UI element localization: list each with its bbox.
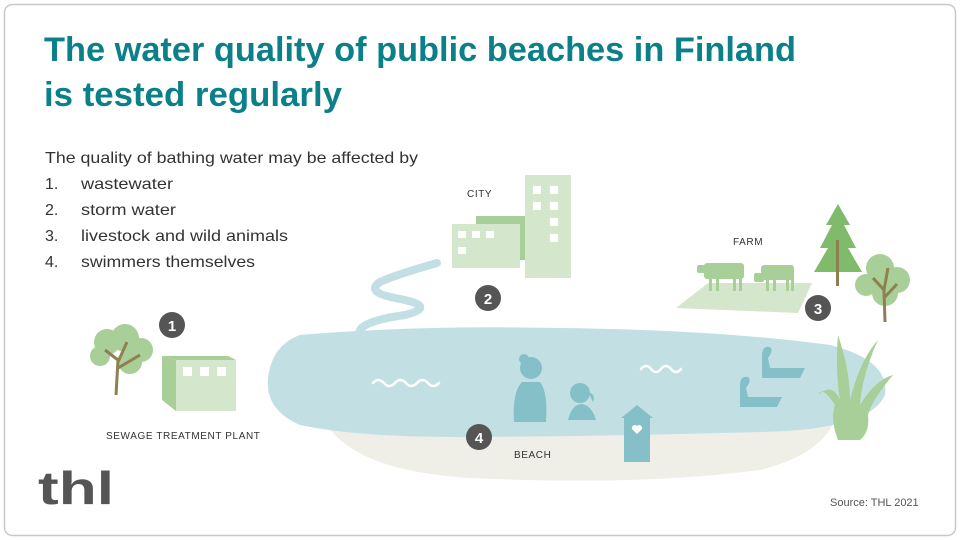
icon: birdhouse xyxy=(621,405,653,462)
badges: 2 xyxy=(484,291,492,308)
text block: factors list xyxy=(45,150,418,271)
label: farm: FARM xyxy=(733,237,763,248)
icon: farm xyxy=(676,263,812,313)
text block: factors list: 2. xyxy=(45,202,58,219)
icon: ducks xyxy=(740,347,805,407)
title: is tested regularly xyxy=(44,76,342,114)
source: Source: THL 2021 xyxy=(830,497,919,509)
title: The water quality of public beaches in Finland xyxy=(44,31,796,69)
icon: sewage treatment plant xyxy=(90,324,236,411)
text block: factors list: livestock and wild animals xyxy=(81,228,288,245)
text block: factors list: 1. xyxy=(45,176,58,193)
text block: factors list: wastewater xyxy=(80,176,174,193)
icon: pine tree xyxy=(814,204,862,286)
label: sewage treatment plant: SEWAGE TREATMENT PLANT xyxy=(106,431,261,442)
beach sand xyxy=(320,400,835,481)
label: beach: BEACH xyxy=(514,450,551,461)
icon: city xyxy=(452,175,571,278)
icon: swimmers xyxy=(514,354,596,422)
icon: reeds xyxy=(818,335,893,440)
label: city: CITY xyxy=(467,189,492,200)
text block: factors list: swimmers themselves xyxy=(81,254,255,271)
text block: factors list: The quality of bathing water may be affected by xyxy=(45,150,418,167)
title xyxy=(44,31,796,114)
text block: factors list: storm water xyxy=(81,202,177,219)
badges: 3 xyxy=(814,301,822,318)
badges: 4 xyxy=(475,430,484,447)
badges: 1 xyxy=(168,318,176,335)
river xyxy=(360,263,437,342)
badges xyxy=(159,285,831,450)
text block: factors list: 4. xyxy=(45,254,58,271)
icon: round tree xyxy=(855,254,910,322)
logo: thl: thl xyxy=(38,462,114,514)
waves xyxy=(373,366,681,386)
lake xyxy=(268,327,885,437)
text block: factors list: 3. xyxy=(45,228,58,245)
